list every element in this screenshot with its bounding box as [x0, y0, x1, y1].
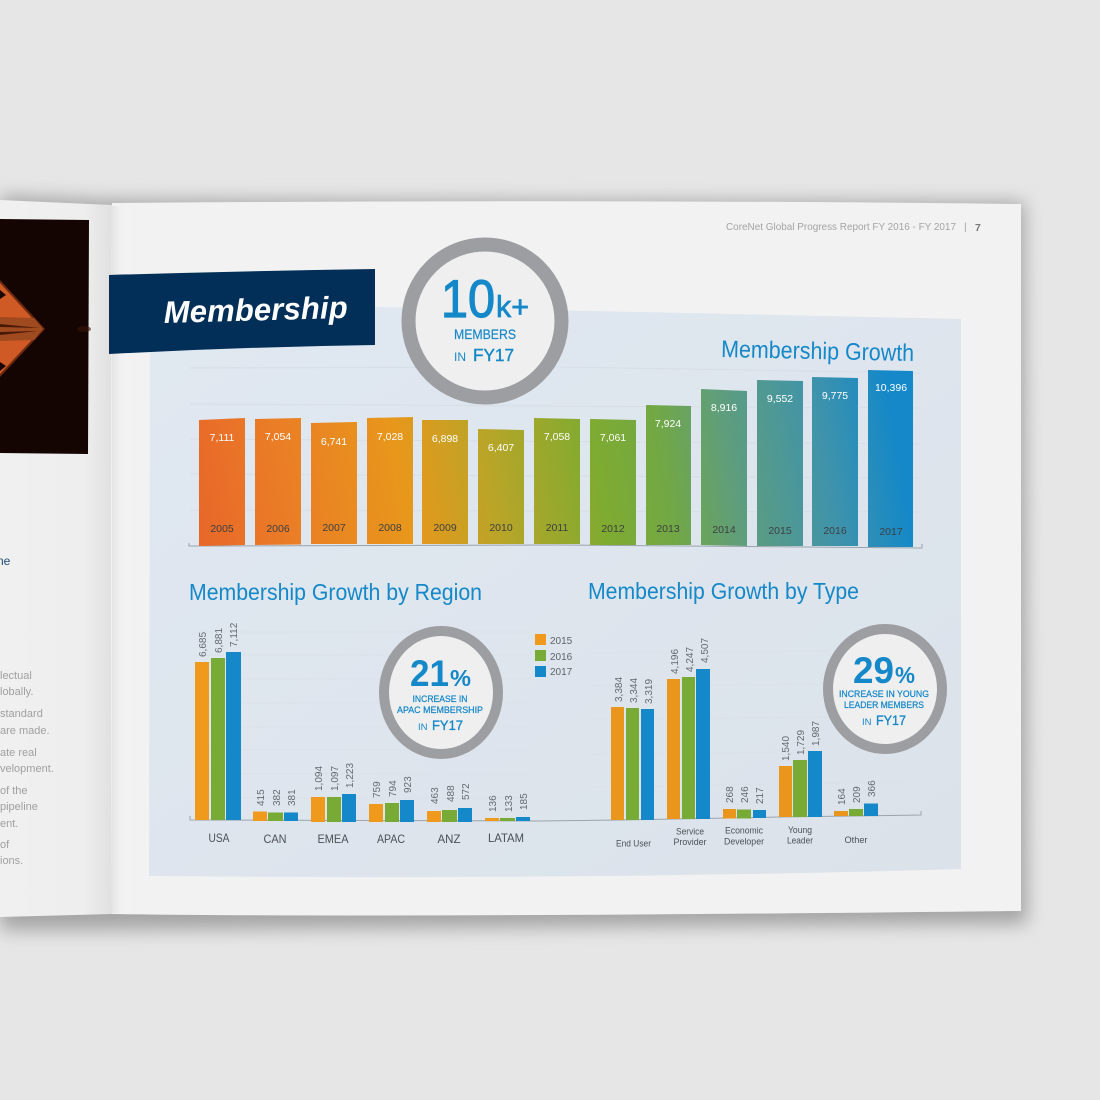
left page cut-off text: lobally. [0, 686, 33, 698]
bar chart: membership growth: 2015 [768, 525, 792, 537]
main chart gridlines [190, 367, 921, 512]
bar chart: membership growth: 7,061 [600, 432, 626, 444]
blue panel background [149, 303, 961, 877]
callout: 29%: LEADER MEMBERS [844, 700, 924, 711]
bar chart: growth by region: 133 [504, 795, 515, 812]
bar chart: membership growth: 2017 [879, 526, 903, 538]
bar chart: membership growth: 6,898 [432, 433, 458, 445]
bar chart: membership growth: 8,916 [711, 402, 737, 414]
heading: by type: Membership Growth by Type [588, 578, 859, 604]
legend [535, 634, 573, 678]
bar chart: membership growth: 2011 [546, 522, 568, 534]
callout: 21%: APAC MEMBERSHIP [397, 705, 483, 716]
left page cut-off text: are made. [0, 725, 50, 737]
right page [111, 201, 1021, 915]
left page cut-off text: standard [0, 708, 43, 720]
page header: 7 [975, 222, 981, 234]
bar chart: growth by region: 6,881 [214, 628, 225, 653]
bar chart: membership growth: 9,552 [767, 393, 793, 405]
bar chart: membership growth: 2009 [433, 522, 457, 534]
callout: 21%: FY17 [432, 717, 463, 733]
bar chart: growth by type [590, 638, 921, 850]
bar chart: membership growth: 7,058 [544, 431, 570, 443]
callout: 29% [828, 629, 942, 749]
bar chart: growth by type: Leader [787, 836, 813, 846]
bar chart: growth by type: 4,507 [700, 638, 711, 663]
callout: 29%: INCREASE IN YOUNG [839, 689, 929, 700]
bar chart: growth by type: 4,247 [685, 647, 696, 672]
bar chart: membership growth: 2006 [266, 523, 290, 535]
bar chart: growth by region: ANZ [438, 834, 460, 846]
left page cut-off text: of [0, 839, 10, 851]
bar chart: membership growth: 7,054 [265, 431, 291, 443]
callout: 10k+ members: k+ [496, 289, 529, 324]
bar chart: growth by region: 794 [388, 780, 399, 797]
bar chart: growth by type: 1,540 [781, 736, 792, 761]
bar chart: membership growth: 6,407 [488, 442, 514, 454]
bar chart: membership growth: 2010 [489, 522, 513, 534]
bar chart: growth by region: 7,112 [229, 622, 240, 647]
page header: | [964, 221, 967, 233]
callout: 21%: INCREASE IN [412, 694, 468, 705]
callout: 29%: IN [862, 717, 872, 728]
bar chart: growth by type: Economic [725, 826, 763, 836]
bar chart: growth by type: 3,319 [644, 679, 655, 704]
bar chart: growth by type: 366 [867, 780, 878, 797]
bar chart: growth by type: Service [676, 826, 704, 838]
left page cut-off text: of the [0, 785, 28, 797]
bar chart: growth by region: 185 [519, 793, 530, 810]
bar chart: growth by region [190, 622, 620, 846]
bar chart: membership growth: 2005 [210, 523, 234, 535]
bar chart: membership growth: 2007 [322, 522, 346, 534]
callout: 10k+ members: 10 [441, 270, 495, 329]
bar chart: growth by region: 923 [403, 776, 414, 793]
bar chart: growth by type: Developer [724, 836, 764, 848]
left page cut-off text [0, 554, 54, 867]
bar chart: growth by region: 136 [488, 795, 499, 812]
left page cut-off text: ate real [0, 747, 37, 759]
left page cut-off text: velopment. [0, 763, 54, 775]
bar chart: membership growth: 7,924 [655, 418, 681, 430]
left page [0, 200, 112, 917]
bar chart: growth by type: Provider [674, 837, 706, 848]
callout: 29%: % [895, 662, 915, 688]
bar chart: growth by type: Other [844, 835, 868, 846]
left page cut-off text: lectual [0, 670, 32, 682]
bar chart: membership growth: 2008 [378, 522, 402, 534]
left page cut-off text: ions. [0, 855, 23, 867]
bar chart: growth by type: 3,384 [614, 677, 625, 702]
bar chart: growth by region: 572 [461, 783, 472, 800]
bar chart: membership growth: 9,775 [822, 390, 848, 402]
bar chart: growth by region: 488 [446, 785, 457, 802]
bar chart: membership growth: 7,028 [377, 431, 403, 443]
gutter shading [112, 206, 130, 913]
bar chart: growth by type: 1,987 [811, 721, 822, 746]
bar chart: membership growth: 2012 [601, 523, 625, 535]
bar chart: growth by type: 4,196 [670, 649, 681, 674]
bar chart: membership growth: 2013 [656, 523, 680, 535]
callout: 21% [384, 631, 498, 754]
bar chart: growth by region: 1,097 [330, 766, 341, 791]
legend: 2015 [550, 636, 573, 647]
callout: 10k+ members: IN [454, 350, 466, 364]
bar chart: membership growth: 2014 [712, 524, 736, 536]
heading: Membership Growth: Membership Growth [721, 336, 914, 367]
bar chart: growth by type: 246 [740, 786, 751, 803]
callout: 10k+ members: MEMBERS [454, 326, 516, 342]
callout: 10k+ members: FY17 [473, 345, 514, 365]
bar chart: growth by region: 6,685 [198, 632, 209, 657]
callout: 29%: 29 [853, 650, 894, 691]
bar chart: growth by type: 1,729 [796, 730, 807, 755]
bar chart: growth by region: EMEA [318, 834, 349, 846]
section banner [109, 269, 375, 354]
book shadow [0, 196, 1027, 930]
legend: 2016 [550, 652, 573, 663]
bar chart: growth by type: Young [788, 825, 812, 836]
bar chart: growth by type: 164 [837, 788, 848, 805]
bar chart: growth by region: USA [208, 833, 230, 845]
bar chart: membership growth: 7,111 [210, 432, 235, 444]
bar chart: membership growth: 6,741 [321, 436, 347, 448]
bar chart: membership growth [189, 370, 922, 548]
bar chart: growth by type: 268 [725, 786, 736, 803]
bar chart: growth by type: End User [616, 838, 651, 850]
bar chart: growth by type: 3,344 [629, 678, 640, 703]
bar chart: growth by type: 217 [755, 787, 766, 804]
left page cut-off text: ent. [0, 818, 18, 830]
page header: CoreNet Global Progress Report FY 2016 - FY 2017 [726, 221, 956, 233]
section banner: Membership [163, 290, 348, 330]
bar chart: growth by region: LATAM [488, 833, 524, 845]
callout: 29%: FY17 [876, 712, 906, 728]
left page cut-off text: pipeline [0, 801, 38, 813]
bar chart: membership growth: 2016 [823, 525, 847, 537]
callout: 21%: % [450, 665, 471, 691]
heading: by region: Membership Growth by Region [189, 579, 482, 605]
callout: 10k+ members [408, 244, 562, 398]
bar chart: growth by region: 1,094 [314, 766, 325, 791]
bar chart: growth by type: 209 [852, 786, 863, 803]
bar chart: growth by region: 381 [287, 789, 298, 806]
bar chart: growth by region: 415 [256, 789, 267, 806]
bar chart: growth by region: 382 [272, 789, 283, 806]
legend: 2017 [550, 667, 573, 678]
left page photo [0, 219, 91, 454]
bar chart: growth by region: APAC [377, 834, 405, 846]
callout: 21%: 21 [410, 653, 449, 694]
bar chart: growth by region: 759 [372, 781, 383, 798]
bar chart: growth by region: 463 [430, 787, 441, 804]
bar chart: growth by region: 1,223 [345, 763, 356, 788]
callout: 21%: IN [418, 722, 428, 733]
bar chart: membership growth: 10,396 [875, 382, 907, 394]
bar chart: growth by region: CAN [264, 834, 286, 846]
